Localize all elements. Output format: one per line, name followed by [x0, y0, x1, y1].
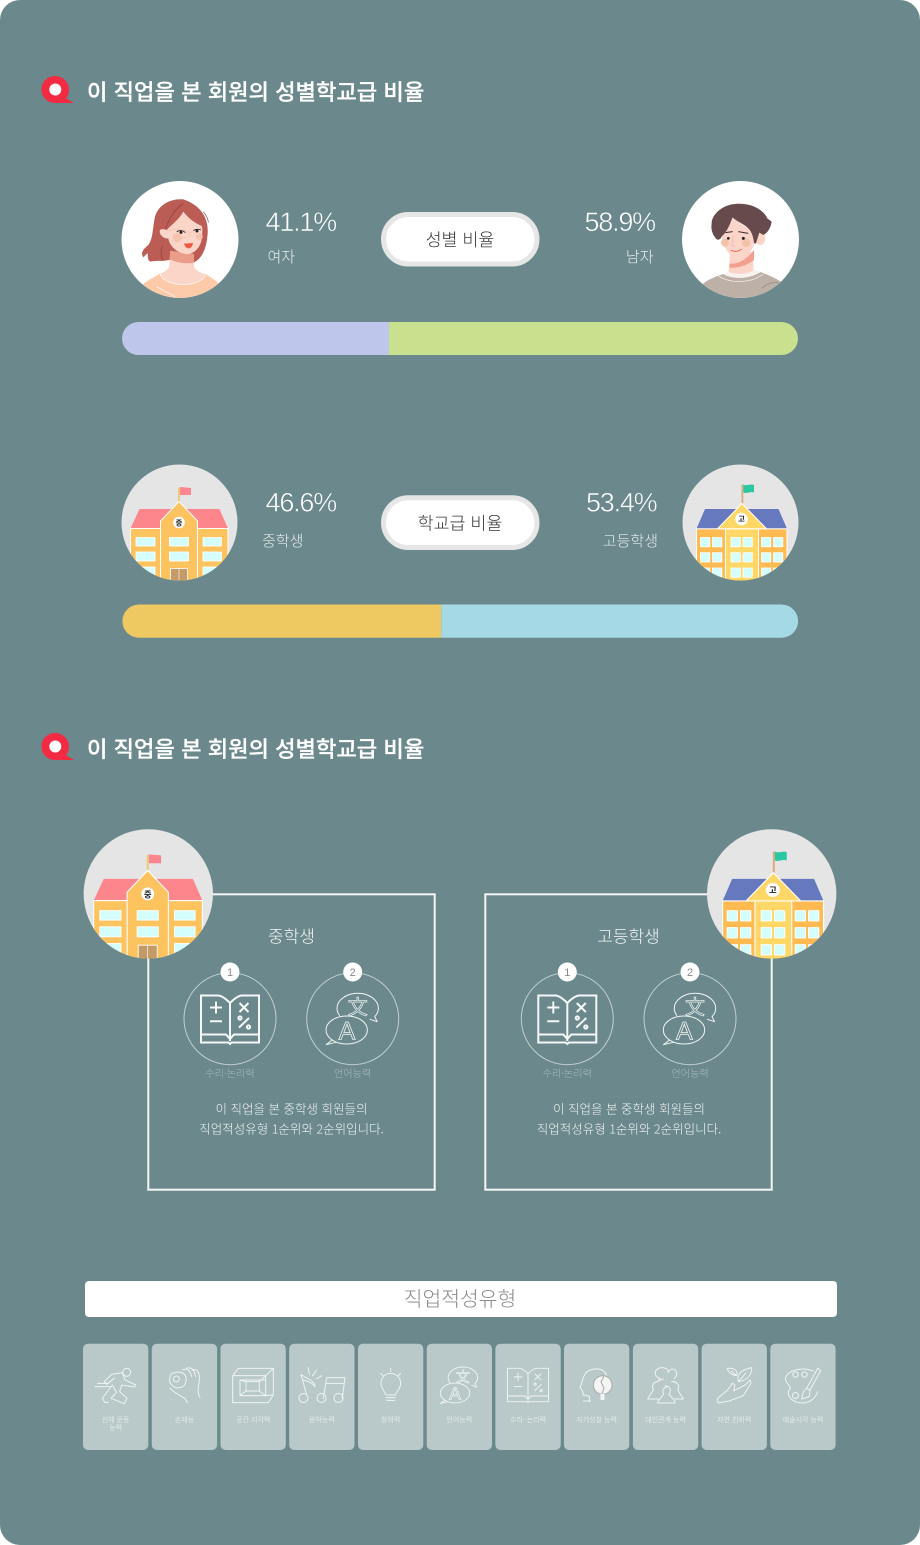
description	[199, 1098, 384, 1138]
icon: red search bubble	[42, 733, 74, 760]
label: male: 남자	[626, 246, 654, 267]
pill: gender ratio	[384, 214, 537, 264]
pill: gender ratio: 성별 비율	[426, 227, 494, 252]
legend: aptitude type cards	[83, 1344, 836, 1450]
icon: middle school	[122, 464, 238, 584]
card: physical: 신체 운동	[102, 1415, 130, 1425]
bar: gender split	[122, 322, 798, 355]
rank 1: math logic	[521, 962, 613, 1080]
rank 2: language: 언어능력	[334, 1065, 371, 1080]
icon: high school	[707, 829, 836, 963]
rank 2: language	[307, 962, 399, 1080]
icon: middle school: 중	[176, 518, 183, 528]
card title: 고등학생	[597, 922, 660, 948]
card frame	[148, 894, 435, 1190]
rank 2: language	[644, 962, 736, 1080]
description	[537, 1098, 721, 1138]
card: dexterity: 손재능	[175, 1415, 195, 1425]
pill: school level ratio	[384, 498, 537, 548]
icon: high school: 고	[769, 884, 777, 896]
rank 1: math logic: 수리·논리력	[205, 1065, 255, 1080]
rank 1: math logic	[184, 962, 276, 1080]
icon: high school: 고	[738, 514, 745, 525]
avatar: man	[682, 181, 799, 302]
rank 1: math logic: 1	[227, 967, 233, 979]
heading text: 이 직업을 본 회원의 성별학교급 비율	[87, 732, 424, 764]
description: 이 직업을 본 중학생 회원들의	[553, 1098, 705, 1118]
stat: middle school 46.6%: 46.6%	[266, 488, 337, 518]
rank 1: math logic: 1	[564, 967, 570, 979]
avatar: woman	[122, 181, 238, 302]
bar: school level split	[122, 604, 798, 638]
label: middle school: 중학생	[262, 530, 303, 551]
legend title bar	[85, 1281, 837, 1317]
card: dexterity	[152, 1344, 217, 1450]
description: 직업적성유형 1순위와 2순위입니다.	[537, 1118, 721, 1138]
description: 직업적성유형 1순위와 2순위입니다.	[199, 1118, 384, 1138]
card: art	[770, 1344, 836, 1450]
legend title bar: 직업적성유형	[404, 1282, 516, 1312]
rank 2: language: 文	[685, 991, 705, 1020]
heading: gender and school ratio	[42, 75, 424, 107]
card: creativity: 창의력	[381, 1415, 400, 1425]
card: spatial: 공간 지각력	[236, 1415, 270, 1425]
panel: middle school aptitude	[84, 829, 435, 1190]
card: interpersonal	[633, 1344, 698, 1450]
label: female: 여자	[268, 246, 295, 267]
card: introspection: 자기성찰 능력	[576, 1415, 617, 1425]
rank 2: language: 文	[348, 991, 368, 1020]
card: math logic	[495, 1344, 561, 1450]
card: language: 언어능력	[446, 1415, 472, 1425]
pill: school level ratio: 학교급 비율	[418, 510, 502, 536]
icon: red search bubble	[42, 76, 74, 103]
card: introspection	[564, 1344, 629, 1450]
card: music	[289, 1344, 354, 1450]
card: nature: 자연 친화력	[717, 1415, 751, 1425]
icon: middle school: 중	[144, 888, 152, 900]
card: interpersonal: 대인관계 능력	[645, 1415, 686, 1425]
heading: aptitude by school level	[42, 732, 424, 764]
rank 1: math logic: 수리·논리력	[543, 1065, 592, 1080]
card: creativity	[358, 1344, 423, 1450]
card: language: A	[449, 1384, 461, 1404]
stat: female 41.1%: 41.1%	[266, 207, 337, 237]
card: nature	[702, 1344, 767, 1450]
card title: 중학생	[268, 922, 315, 948]
stat: male 58.9%: 58.9%	[584, 207, 656, 237]
rank 2: language: A	[339, 1018, 356, 1046]
rank 2: language: 2	[687, 967, 693, 979]
card: math logic: 수리· 논리력	[510, 1415, 546, 1425]
card: music: 음악능력	[309, 1415, 335, 1425]
rank 2: language: 언어능력	[671, 1065, 709, 1080]
panel: gender ratio	[122, 181, 799, 355]
card frame	[485, 894, 772, 1190]
icon: middle school	[84, 829, 213, 963]
heading text: 이 직업을 본 회원의 성별학교급 비율	[87, 75, 424, 107]
card: physical	[83, 1344, 148, 1450]
card: spatial	[220, 1344, 286, 1450]
icon: high school	[682, 464, 798, 585]
rank 2: language: 2	[350, 967, 356, 979]
description: 이 직업을 본 중학생 회원들의	[215, 1098, 368, 1118]
panel: high school aptitude	[485, 829, 836, 1190]
stat: high school 53.4%: 53.4%	[586, 488, 658, 518]
label: high school: 고등학생	[603, 530, 658, 551]
card: language: 文	[456, 1367, 470, 1387]
rank 2: language: A	[676, 1018, 693, 1046]
card: physical: 능력	[109, 1423, 122, 1433]
panel: school level ratio	[122, 464, 798, 638]
card: art: 예술시각 능력	[783, 1415, 823, 1425]
card: language	[427, 1344, 492, 1450]
